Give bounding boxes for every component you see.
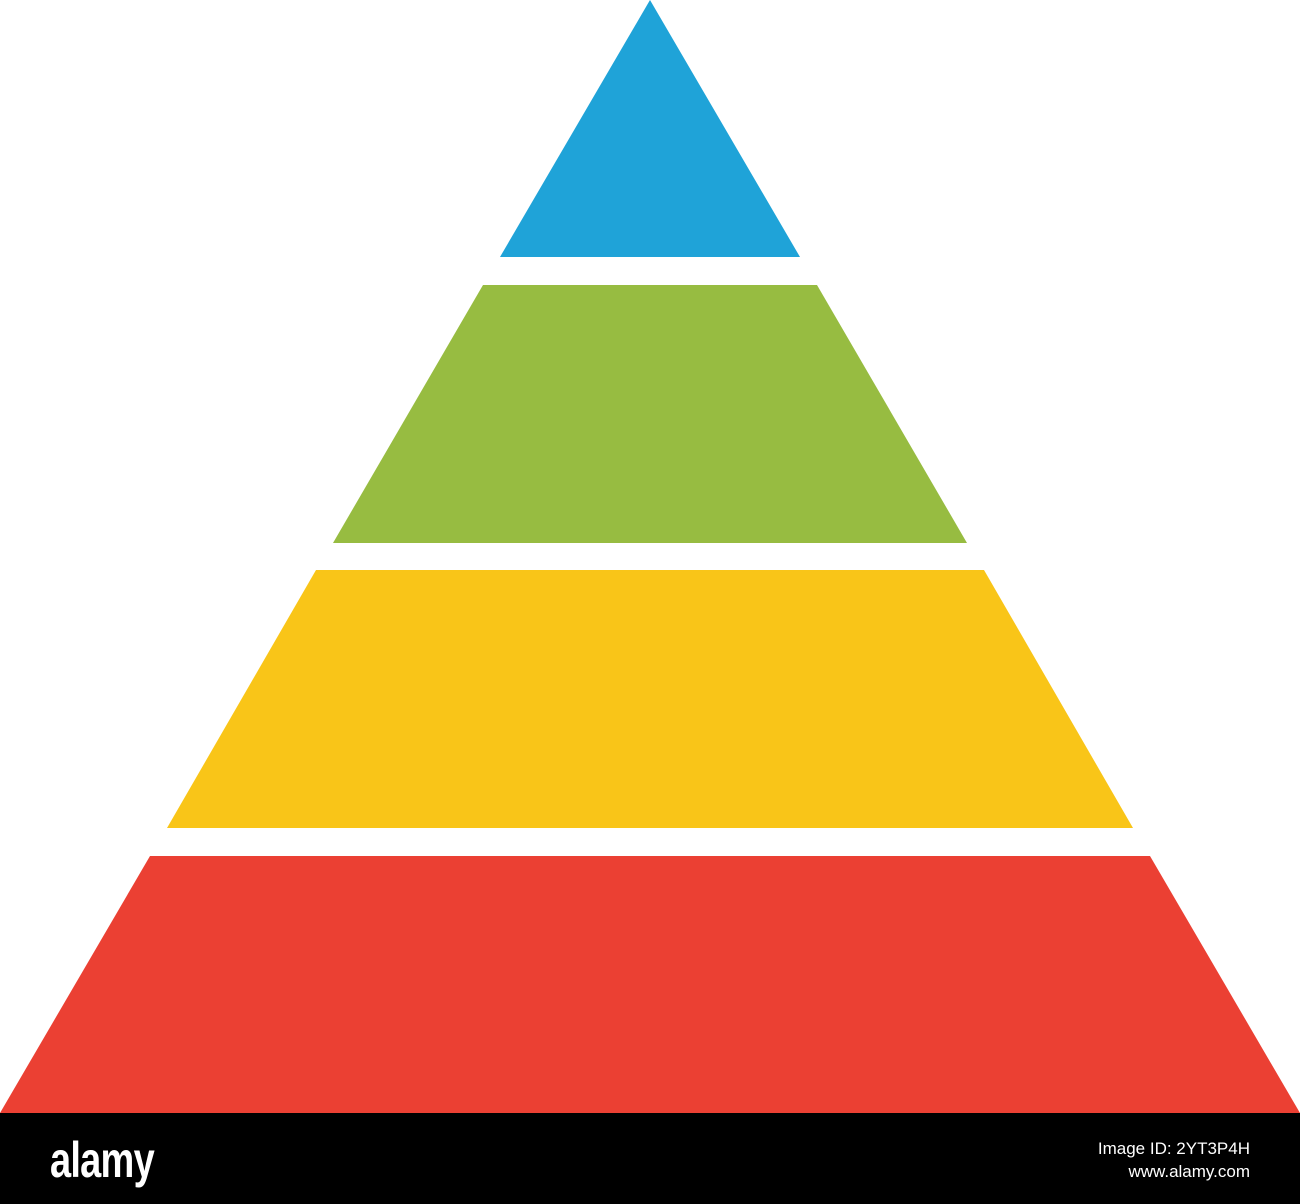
- logo text: alamy: [50, 1132, 154, 1188]
- image id text: Image ID: 2YT3P4H: [1098, 1139, 1250, 1158]
- footer bar: [0, 1113, 1300, 1204]
- image id text: www.alamy.com: [1128, 1162, 1250, 1181]
- layer 4: red base: [0, 856, 1300, 1113]
- layer 1: blue top triangle: [500, 0, 800, 257]
- layer 2: green: [333, 285, 967, 543]
- image id text: [1098, 1139, 1250, 1181]
- layer 3: yellow: [167, 570, 1133, 828]
